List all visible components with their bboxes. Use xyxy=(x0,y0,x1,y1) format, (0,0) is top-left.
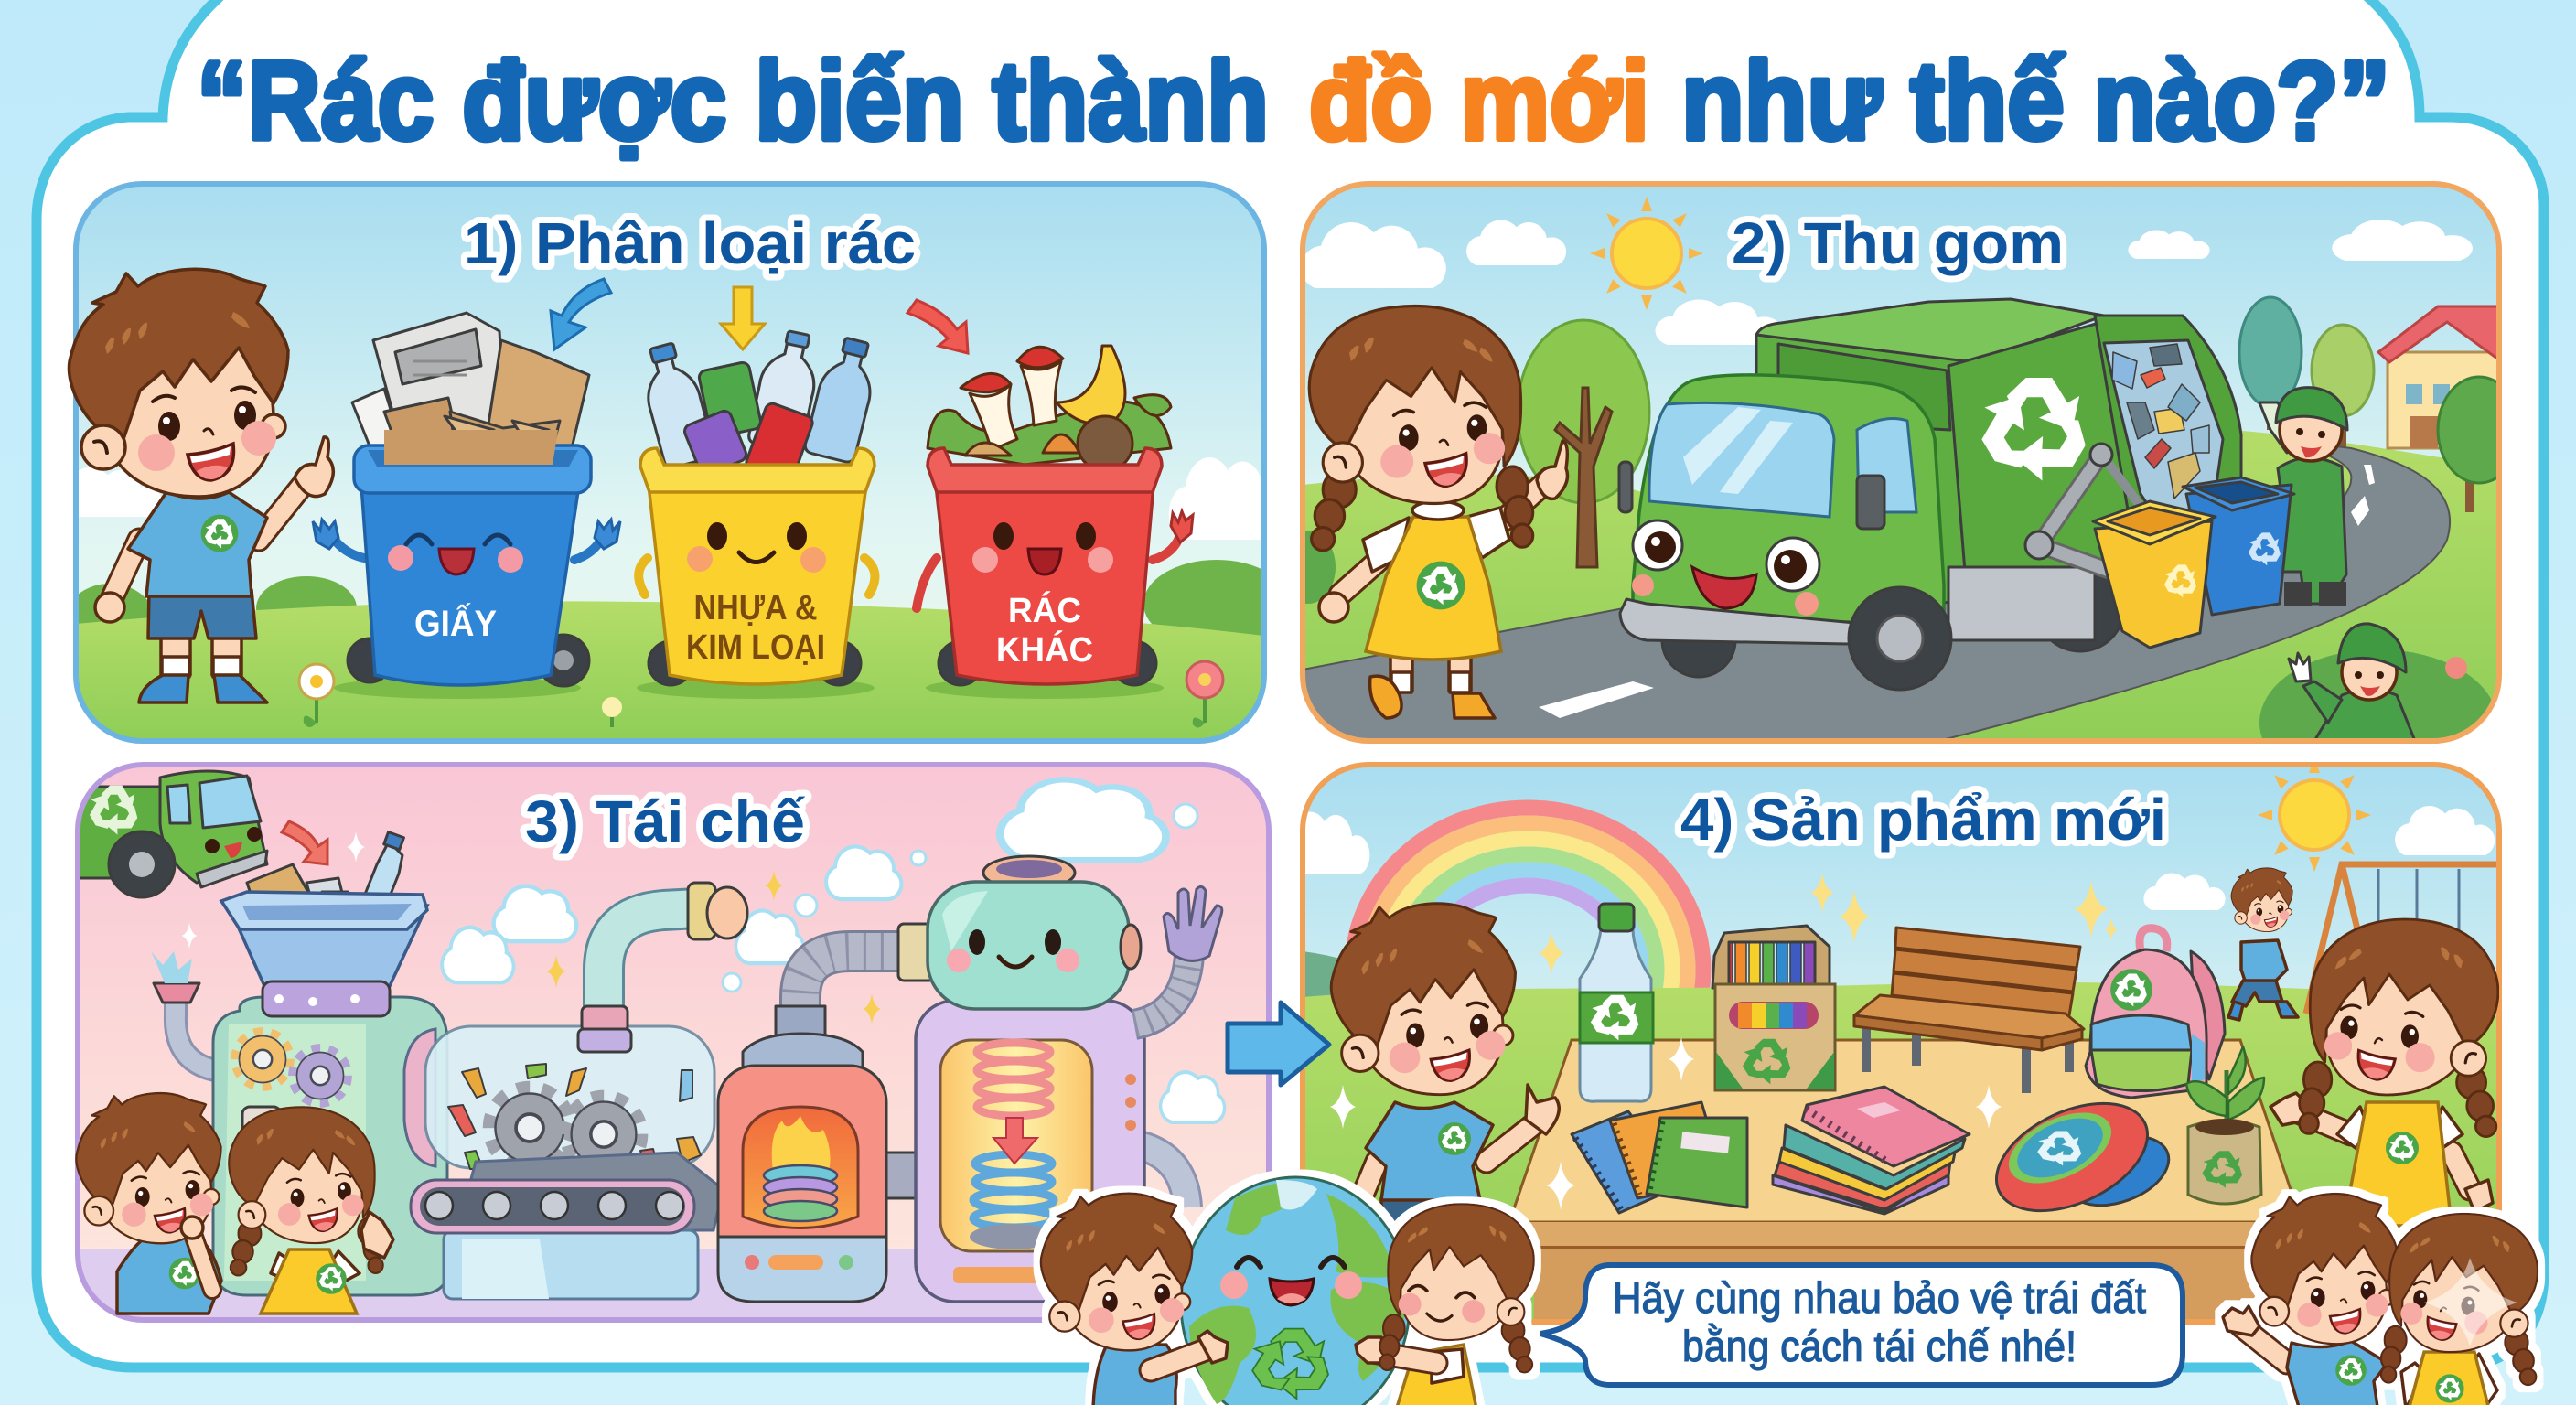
heading 4: 4) Sản phẩm mới xyxy=(1680,787,2166,853)
arrow: blue to paper bin xyxy=(551,279,611,349)
crayon box xyxy=(1712,926,1835,1090)
title xyxy=(197,38,2390,163)
title: như thế nào?” xyxy=(1681,38,2390,163)
title: “Rác được biến thành xyxy=(197,38,1269,163)
arrow: recycling to new products xyxy=(1228,1003,1329,1085)
paper contents xyxy=(352,313,589,462)
girl presenting xyxy=(2270,919,2498,1226)
bin: other waste xyxy=(917,346,1193,685)
rainbow xyxy=(1352,808,1703,1132)
backpack xyxy=(2086,928,2225,1098)
background trees and house xyxy=(1281,297,2520,604)
frisbees xyxy=(1980,1081,2178,1233)
bin: paper: GIẤY xyxy=(414,602,497,644)
heading 1: 1) Phân loại rác xyxy=(464,210,916,276)
plastic contents xyxy=(638,331,880,484)
girl waving xyxy=(2381,1214,2538,1405)
panel 1: sorting xyxy=(53,184,1290,741)
stack of notebooks xyxy=(1773,1087,1970,1214)
bench xyxy=(1854,928,2084,1093)
panel 4: new products xyxy=(1279,758,2499,1322)
earth with boy and girl xyxy=(1041,1177,1534,1405)
boy waving xyxy=(2223,1194,2397,1405)
steam clouds xyxy=(182,779,1225,1122)
glass shredder drum xyxy=(404,1026,714,1171)
worker waving xyxy=(2259,624,2497,796)
bin: plastic and metal: KIM LOẠI xyxy=(686,628,825,667)
title: đồ mới xyxy=(1309,38,1649,163)
speech bubble: Hãy cùng nhau bảo vệ trái đất xyxy=(1613,1273,2146,1322)
two children waving xyxy=(2223,1194,2538,1405)
bottle xyxy=(1580,904,1653,1101)
bin: plastic and metal xyxy=(638,331,880,685)
sun xyxy=(2258,758,2371,872)
sun xyxy=(1590,197,1703,310)
heading 3: 3) Tái chế xyxy=(525,788,805,854)
robot press with face xyxy=(898,856,1222,1302)
arrow: yellow to plastic bin xyxy=(721,287,765,349)
bin: other waste: KHÁC xyxy=(996,629,1093,670)
glass pipe xyxy=(578,883,747,1052)
recycling bins: yellow and blue xyxy=(2093,477,2294,648)
small truck xyxy=(78,771,267,897)
shredder machine with hopper xyxy=(151,832,447,1295)
bin: other waste: RÁC xyxy=(1008,590,1081,630)
conveyor belt and base xyxy=(411,1153,723,1299)
items in hopper xyxy=(247,832,403,915)
sparkles xyxy=(1539,873,2118,975)
girl beside boy xyxy=(229,1107,393,1314)
panel 2: collection xyxy=(1300,181,2502,744)
garbage truck xyxy=(1619,299,2241,690)
table xyxy=(1509,1040,2302,1319)
bin: paper xyxy=(313,313,620,686)
road xyxy=(1303,439,2450,745)
worker with bins xyxy=(2259,388,2347,606)
flowers xyxy=(299,661,1223,728)
boy hugging earth xyxy=(1041,1194,1228,1405)
notebooks xyxy=(1572,1102,1747,1213)
furnace xyxy=(718,951,923,1302)
boy presenting xyxy=(1331,904,1559,1281)
speech bubble xyxy=(1540,1265,2183,1385)
watermark sparkle xyxy=(2424,1258,2517,1346)
girl hugging earth xyxy=(1356,1204,1534,1405)
speech bubble: bằng cách tái chế nhé! xyxy=(1682,1322,2077,1370)
earth xyxy=(1181,1177,1410,1405)
food scraps xyxy=(928,346,1171,471)
red arrow into hopper xyxy=(282,821,327,864)
boy pointing xyxy=(69,269,333,702)
heading 2: 2) Thu gom xyxy=(1732,210,2064,276)
plant in recycled pot xyxy=(2186,1046,2264,1204)
swing set and child xyxy=(2228,864,2499,1020)
bin: plastic and metal: NHỰA & xyxy=(693,589,818,627)
girl pointing xyxy=(1309,306,1568,718)
boy thinking xyxy=(76,1093,221,1314)
arrow: red to other waste bin xyxy=(907,300,968,353)
panel 3: recycling xyxy=(76,765,1269,1323)
